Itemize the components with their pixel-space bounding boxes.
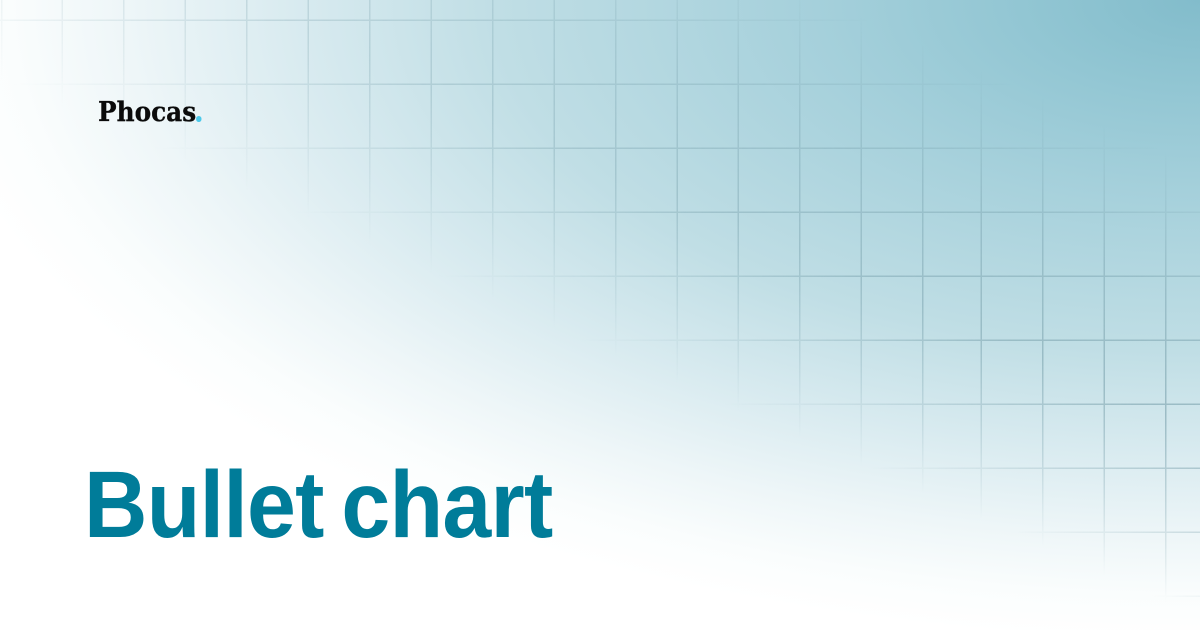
- title: Bullet chart: [84, 452, 553, 558]
- logo: Phocas: Phocas: [98, 96, 196, 128]
